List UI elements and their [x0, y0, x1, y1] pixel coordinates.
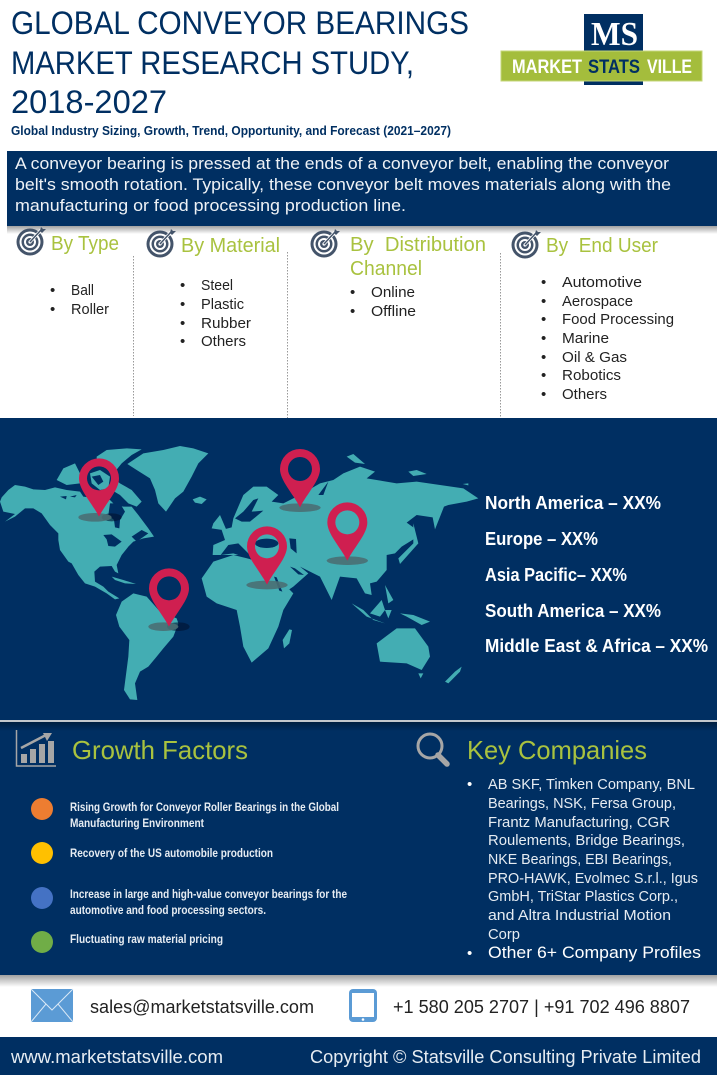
panel: by material [146, 229, 280, 350]
company list: Bearings, NSK, Fersa Group, [488, 795, 676, 812]
icon: pin south america [149, 568, 189, 627]
footer: www.marketstatsville.com [10, 1047, 223, 1067]
panel: by end user: • [541, 293, 546, 310]
panel: by type: By Type [51, 233, 119, 255]
icon: pin asia [327, 502, 367, 561]
icon: pin middle east [247, 526, 287, 585]
panel: intro: belt's smooth rotation. Typically, these conveyor belt moves materials along with the [15, 175, 671, 194]
company list [467, 776, 701, 962]
icon: pin europe [280, 449, 320, 507]
contact: phone: +1 580 205 2707 | +91 702 496 8807 [393, 997, 690, 1017]
panel: by type: Roller [71, 301, 109, 318]
panel: by distribution channel: By Distribution [350, 234, 486, 256]
icon: phone [349, 989, 377, 1022]
company list: Roulements, Bridge Bearings, [488, 832, 685, 849]
panel: by end user: Automotive [562, 274, 642, 291]
company list: AB SKF, Timken Company, BNL [488, 776, 695, 793]
panel: by type: • [50, 301, 55, 318]
logo: VILLE [647, 57, 692, 78]
contact: email: sales@marketstatsville.com [90, 997, 314, 1017]
icon: target [512, 230, 541, 258]
growth factor list [31, 798, 347, 953]
footer: Copyright © Statsville Consulting Private Limited [310, 1047, 701, 1067]
regional shares: Europe – XX% [485, 529, 598, 549]
panel: regional map [0, 418, 717, 720]
growth factor list: Fluctuating raw material pricing [70, 934, 223, 946]
panel: growth and companies [0, 722, 717, 987]
regional shares: Asia Pacific– XX% [485, 565, 627, 585]
icon: growth chart [16, 730, 56, 766]
logo: MARKET [512, 57, 582, 78]
company list: PRO-HAWK, Evolmec S.r.l., Igus [488, 870, 698, 887]
pins [78, 449, 368, 631]
title [11, 5, 469, 120]
icon: pin north america [79, 458, 119, 517]
panel: intro: manufacturing or food processing production line. [15, 196, 406, 215]
panel: by end user: • [541, 311, 546, 328]
company list: • [467, 945, 472, 962]
panel: by distribution channel: • [350, 284, 355, 301]
panel: by distribution channel: • [350, 303, 355, 320]
panel: by material: • [180, 333, 185, 350]
heading: key companies: Key Companies [467, 735, 647, 765]
company list: GmbH, TriStar Plastics Corp., [488, 888, 678, 905]
panel: by material: Rubber [201, 315, 251, 332]
company list: Corp [488, 926, 520, 943]
panel: by material: • [180, 277, 185, 294]
panel: by type: Ball [71, 282, 94, 299]
regional shares: North America – XX% [485, 493, 661, 513]
title: MARKET RESEARCH STUDY, [11, 45, 414, 81]
regional shares: Middle East & Africa – XX% [485, 636, 708, 656]
panel: intro [7, 151, 717, 234]
panel: by end user: • [541, 349, 546, 366]
contact: phone [349, 989, 690, 1022]
panel: by end user: Marine [562, 330, 609, 347]
contact: email [31, 989, 314, 1022]
panel: by material: • [180, 315, 185, 332]
panel: by distribution channel [310, 229, 486, 320]
icon: target [146, 229, 176, 258]
panel: by end user: • [541, 330, 546, 347]
logo: MS [591, 16, 638, 53]
heading: growth factors: Growth Factors [72, 735, 248, 765]
panel: by type [16, 227, 119, 318]
panel: by material: Others [201, 333, 246, 350]
panel: by end user: • [541, 367, 546, 384]
panel: by material: • [180, 296, 185, 313]
subtitle: Global Industry Sizing, Growth, Trend, Opportunity, and Forecast (2021–2027) [11, 124, 451, 138]
panel: by distribution channel: Online [371, 284, 415, 301]
panel: by material: By Material [181, 235, 280, 257]
icon: target [310, 229, 340, 258]
panel: by end user: Robotics [562, 367, 621, 384]
regional shares [485, 493, 708, 656]
panel: by type: • [50, 282, 55, 299]
growth factor list: Manufacturing Environment [70, 818, 204, 830]
title: 2018-2027 [11, 84, 167, 120]
panel: by end user: Oil & Gas [562, 349, 627, 366]
growth factor list: automotive and food processing sectors. [70, 905, 266, 917]
company list: Frantz Manufacturing, CGR [488, 814, 670, 831]
title: GLOBAL CONVEYOR BEARINGS [11, 5, 469, 41]
panel: by end user: Others [562, 386, 607, 403]
panel: by end user: • [541, 274, 546, 291]
panel: by distribution channel: Offline [371, 303, 416, 320]
panel: by end user: Aerospace [562, 293, 633, 310]
panel: by end user [512, 230, 674, 403]
company list: NKE Bearings, EBI Bearings, [488, 851, 672, 868]
company list: • [467, 776, 472, 793]
company list: and Altra Industrial Motion [488, 907, 671, 924]
panel: by end user: • [541, 386, 546, 403]
regional shares: South America – XX% [485, 601, 661, 621]
footer [0, 1037, 717, 1075]
company list: Other 6+ Company Profiles [488, 943, 701, 962]
logo [501, 14, 702, 85]
growth factor list: Rising Growth for Conveyor Roller Bearings in the Global [70, 802, 339, 814]
panel: by material: Steel [201, 277, 233, 294]
world map [0, 446, 478, 700]
panel: by end user: Food Processing [562, 311, 674, 328]
panel: by material: Plastic [201, 296, 244, 313]
panel: by distribution channel: Channel [350, 258, 422, 280]
icon: envelope [31, 989, 73, 1022]
panel: intro: A conveyor bearing is pressed at the ends of a conveyor belt, enabling the conveyor [15, 154, 669, 173]
panel: by end user: By End User [546, 235, 658, 257]
icon: target [16, 227, 46, 256]
growth factor list: Recovery of the US automobile production [70, 848, 273, 860]
icon: magnifier [418, 734, 447, 764]
growth factor list: Increase in large and high-value conveyor bearings for the [70, 889, 347, 901]
logo: STATS [588, 57, 640, 78]
